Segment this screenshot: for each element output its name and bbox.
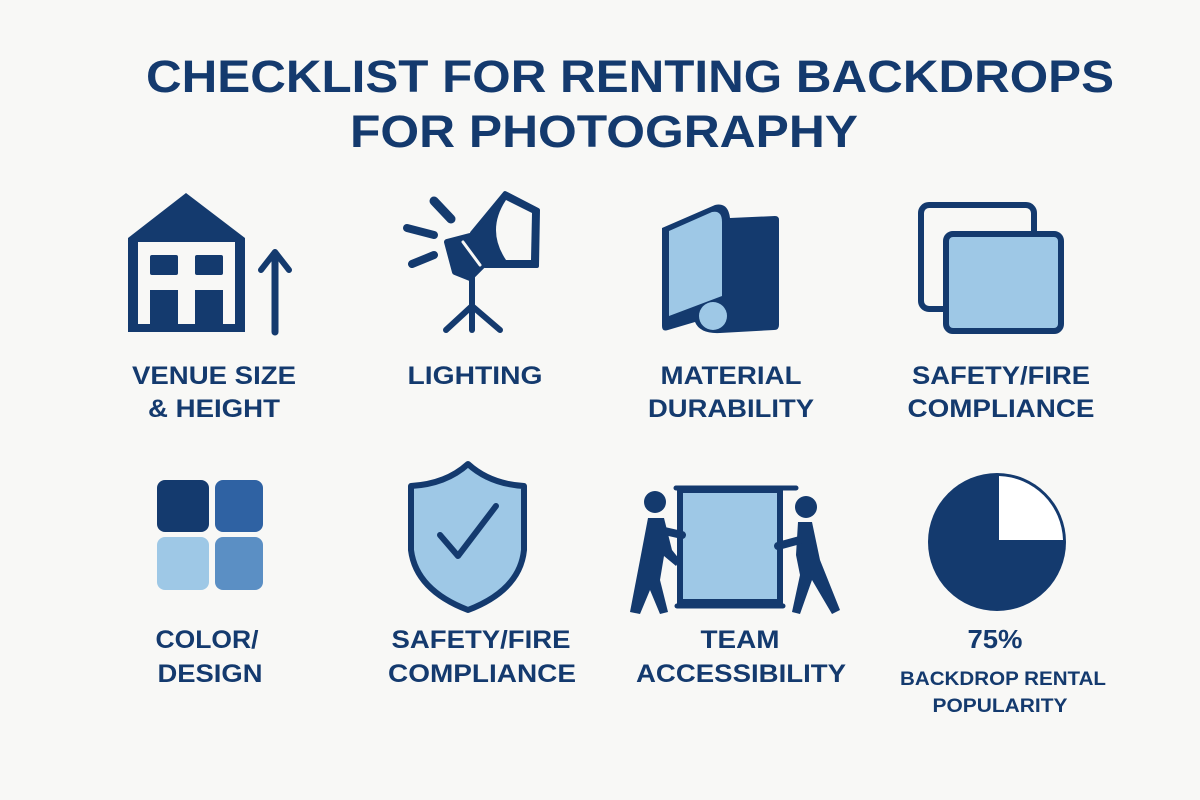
label: team accessibility: ACCESSIBILITY bbox=[636, 660, 846, 688]
label: safety fire compliance: COMPLIANCE bbox=[908, 395, 1094, 423]
label: safety fire compliance bbox=[908, 362, 1094, 423]
pie chart: 75% bbox=[928, 473, 1066, 611]
label: safety fire compliance: SAFETY/FIRE bbox=[912, 362, 1090, 390]
icon: material roll bbox=[662, 205, 779, 333]
label: team accessibility bbox=[636, 626, 846, 688]
label: material durability: MATERIAL bbox=[660, 362, 802, 390]
icon: venue building with arrow bbox=[128, 193, 289, 332]
label: 75% popularity: BACKDROP RENTAL bbox=[900, 669, 1106, 690]
label: 75% popularity: POPULARITY bbox=[932, 696, 1068, 717]
label: venue size: VENUE SIZE bbox=[132, 362, 296, 390]
icon: color swatches bbox=[157, 480, 263, 590]
label: 75% popularity: 75% bbox=[968, 624, 1022, 654]
label: safety fire compliance 2: SAFETY/FIRE bbox=[392, 626, 570, 654]
icon: team carrying panel bbox=[630, 488, 840, 614]
title: FOR PHOTOGRAPHY bbox=[350, 106, 858, 157]
title bbox=[146, 51, 1114, 157]
label: lighting: LIGHTING bbox=[408, 362, 542, 390]
title: CHECKLIST FOR RENTING BACKDROPS bbox=[146, 51, 1114, 102]
label: venue size: & HEIGHT bbox=[148, 395, 280, 423]
label: safety fire compliance 2 bbox=[388, 626, 576, 688]
label: material durability: DURABILITY bbox=[648, 395, 814, 423]
icon: shield check bbox=[411, 464, 524, 610]
label: venue size bbox=[132, 362, 296, 423]
label: color design: DESIGN bbox=[158, 660, 262, 688]
label: material durability bbox=[648, 362, 814, 423]
icon: layered panels bbox=[921, 205, 1061, 331]
label: color design: COLOR/ bbox=[156, 626, 259, 654]
icon: lighting bbox=[407, 193, 538, 330]
label: team accessibility: TEAM bbox=[700, 626, 780, 654]
label: safety fire compliance 2: COMPLIANCE bbox=[388, 660, 576, 688]
label: color design bbox=[156, 626, 262, 688]
label: 75% popularity bbox=[900, 624, 1106, 717]
